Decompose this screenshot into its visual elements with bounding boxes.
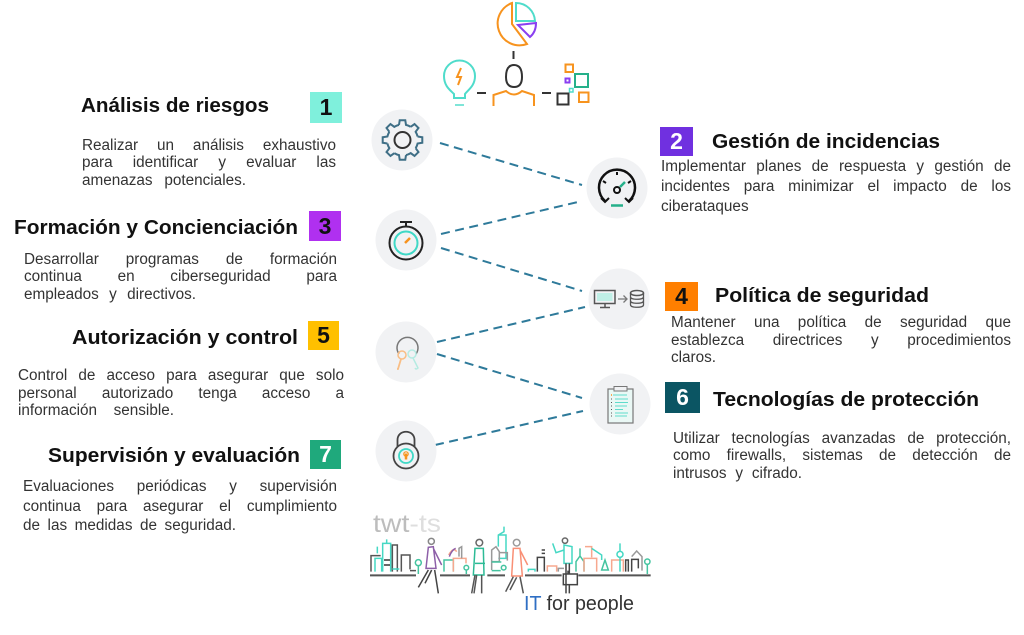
badge 4 xyxy=(665,282,698,311)
text: tecnologías de protección: intrusos y cifrado. xyxy=(673,465,802,482)
heading: Formación y Concienciación: Formación y Concienciación xyxy=(14,216,298,239)
badge 2 xyxy=(660,127,693,156)
text: gestión de incidencias: incidentes para minimizar el impacto de los xyxy=(661,178,1011,195)
text: política de seguridad: claros. xyxy=(671,349,716,366)
text: formación xyxy=(24,251,337,303)
icon: clipboard xyxy=(590,374,650,434)
text: tecnologías de protección: Utilizar tecnologías avanzadas de protección, xyxy=(673,430,1011,447)
badge 5 xyxy=(308,321,339,350)
heading: Análisis de riesgos: Análisis de riesgos xyxy=(81,94,269,117)
badge 1: 1 xyxy=(320,94,332,120)
text: supervisión xyxy=(23,478,337,534)
text: gestión de incidencias: Implementar planes de respuesta y gestión de xyxy=(661,158,1011,175)
text: gestión de incidencias: ciberataques xyxy=(661,198,749,215)
logo wordmark: twt-ts xyxy=(373,510,441,538)
text: autorización: información sensible. xyxy=(18,402,174,419)
icon: monitor to database xyxy=(588,268,650,330)
heading: Autorización y control: Autorización y control xyxy=(72,326,298,349)
icon: gear xyxy=(372,110,432,170)
badge 3: 3 xyxy=(319,212,331,238)
connector lines xyxy=(435,143,585,445)
text: análisis de riesgos: para identificar y evaluar las xyxy=(82,154,336,171)
badge 7 xyxy=(310,440,341,469)
badge 4: 4 xyxy=(675,283,688,309)
text: análisis de riesgos xyxy=(82,137,336,189)
badge 6 xyxy=(665,382,700,413)
icon: keys xyxy=(376,322,436,382)
text: formación: continua en ciberseguridad para xyxy=(24,268,337,285)
text: autorización xyxy=(18,367,344,419)
text: política de seguridad: establezca directrices y procedimientos xyxy=(671,332,1011,349)
text: tecnologías de protección: como firewalls, sistemas de detección de xyxy=(673,447,1011,464)
text: autorización: Control de acceso para asegurar que solo xyxy=(18,367,344,384)
icon: person with pie chart, bulb and squares xyxy=(444,3,588,106)
text: política de seguridad xyxy=(671,314,1011,366)
badge 3 xyxy=(309,211,341,241)
text: supervisión: Evaluaciones periódicas y supervisión xyxy=(23,478,337,495)
heading: Gestión de incidencias: Gestión de incidencias xyxy=(712,130,940,153)
heading: Política de seguridad: Política de seguridad xyxy=(715,284,929,307)
text: autorización: personal autorizado tenga acceso a xyxy=(18,385,344,402)
text: análisis de riesgos: amenazas potenciales. xyxy=(82,172,246,189)
text: supervisión: de las medidas de seguridad. xyxy=(23,517,236,534)
badge 5: 5 xyxy=(317,322,330,348)
text: gestión de incidencias xyxy=(661,158,1011,215)
logo tagline: IT for people xyxy=(524,593,634,615)
badge 7: 7 xyxy=(319,441,332,467)
text: supervisión: continua para asegurar el cumplimiento xyxy=(23,498,337,515)
heading: Tecnologías de protección: Tecnologías de protección xyxy=(713,388,979,411)
icon: gauge xyxy=(586,158,648,218)
text: política de seguridad: Mantener una política de seguridad que xyxy=(671,314,1011,331)
logo: twt-ts skyline xyxy=(370,510,651,615)
badge 6: 6 xyxy=(676,384,689,410)
text: análisis de riesgos: Realizar un análisis exhaustivo xyxy=(82,137,336,154)
heading: Supervisión y evaluación: Supervisión y evaluación xyxy=(48,444,300,467)
icon: padlock xyxy=(376,420,436,482)
text: tecnologías de protección xyxy=(673,430,1011,482)
text: formación: Desarrollar programas de formación xyxy=(24,251,337,268)
icon: stopwatch xyxy=(376,210,436,270)
text: formación: empleados y directivos. xyxy=(24,286,196,303)
badge 1 xyxy=(310,92,342,123)
skyline and walking people xyxy=(370,527,651,593)
badge 2: 2 xyxy=(670,128,683,154)
